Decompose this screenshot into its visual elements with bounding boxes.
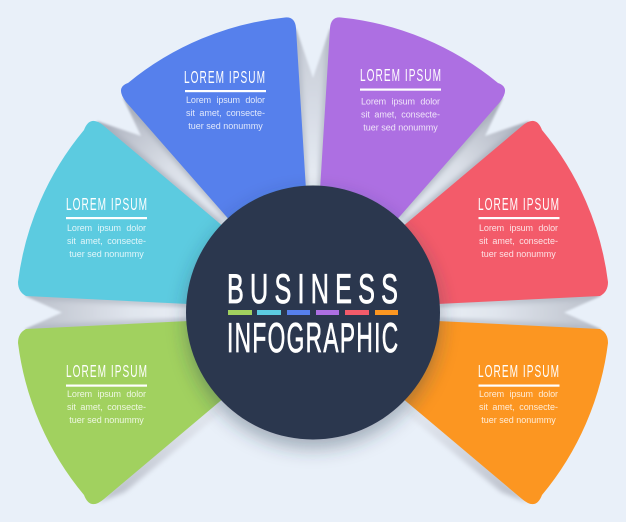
panel: red: LOREM IPSUM <box>478 195 559 215</box>
panel: blue: tuer sed nonummy <box>188 121 263 131</box>
central circle <box>186 186 440 440</box>
panel: green: LOREM IPSUM <box>66 362 147 382</box>
panel: blue: Lorem ipsum dolor <box>186 95 265 105</box>
panel: orange: Lorem ipsum dolor <box>479 389 558 399</box>
panel: purple: LOREM IPSUM <box>360 66 441 86</box>
panel: green: sit amet, consecte- <box>67 402 146 412</box>
panel: orange: tuer sed nonummy <box>481 415 556 425</box>
panel: cyan: Lorem ipsum dolor <box>67 223 146 233</box>
panel: orange: sit amet, consecte- <box>479 402 558 412</box>
panel: blue <box>121 17 306 255</box>
panel: green: tuer sed nonummy <box>69 415 144 425</box>
panel: orange <box>376 318 608 504</box>
panel: blue: LOREM IPSUM <box>184 68 265 88</box>
shadow gap: red and orange <box>440 296 601 330</box>
panel: purple: tuer sed nonummy <box>363 122 438 132</box>
shadow gap: cyan and green <box>25 296 186 330</box>
shadow under orange panel <box>404 395 528 503</box>
colour bars <box>228 310 398 315</box>
panel: cyan: LOREM IPSUM <box>66 195 147 215</box>
panel: red <box>376 121 608 307</box>
panel: orange: LOREM IPSUM <box>478 362 559 382</box>
central circle shadow <box>185 193 441 449</box>
panel: purple: Lorem ipsum dolor <box>361 96 440 106</box>
title: business: BUSINESS <box>227 267 398 313</box>
panel: blue: sit amet, consecte- <box>186 108 265 118</box>
panel: purple: sit amet, consecte- <box>361 110 440 120</box>
panel: green: Lorem ipsum dolor <box>67 389 146 399</box>
panel: cyan: sit amet, consecte- <box>67 236 146 246</box>
panel: green <box>18 318 250 504</box>
panel: purple <box>320 17 505 255</box>
panel: red: tuer sed nonummy <box>481 249 556 259</box>
panel: red: Lorem ipsum dolor <box>479 223 558 233</box>
panel: red: sit amet, consecte- <box>479 236 558 246</box>
panel: cyan: tuer sed nonummy <box>69 249 144 259</box>
shadow gap: blue and purple <box>296 28 330 186</box>
shadow gap: blue and cyan <box>96 98 228 224</box>
shadow under green panel <box>98 395 222 503</box>
shadow gap: purple and red <box>398 98 530 224</box>
title: infographic: INFOGRAPHIC <box>227 315 398 362</box>
panel: cyan <box>18 121 250 307</box>
